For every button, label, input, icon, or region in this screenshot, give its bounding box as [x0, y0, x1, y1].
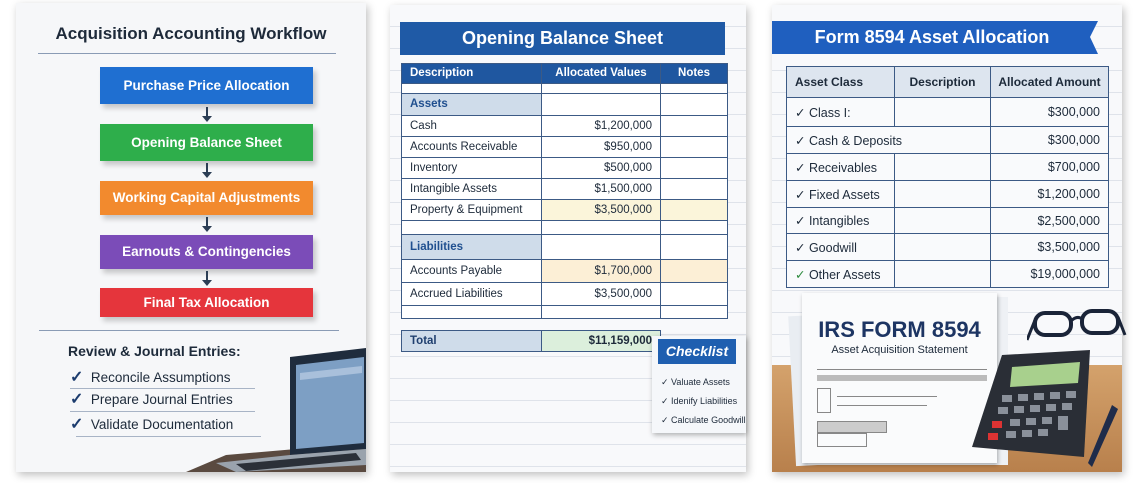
table: asset classes: ✓ Class I: [795, 106, 851, 120]
table: asset classes: $700,000 [1048, 160, 1100, 174]
step: opening balance sheet [100, 124, 313, 161]
icon: calculator [972, 350, 1118, 467]
table: balance sheet: Intangible Assets [410, 182, 497, 194]
callout: checklist [652, 336, 746, 433]
callout: checklist: ✓ Idenify Liabilities [661, 396, 737, 406]
total row [401, 330, 661, 352]
table: balance sheet: Inventory [410, 162, 457, 174]
table: balance sheet: Assets [410, 98, 448, 110]
title bar: opening balance sheet [400, 22, 725, 55]
table: asset classes: Description [909, 75, 976, 89]
table: asset classes: ✓ Cash & Deposits [795, 134, 902, 148]
table: balance sheet: Accrued Liabilities [410, 288, 503, 300]
table: balance sheet: $500,000 [604, 162, 652, 174]
step: final tax allocation: Final Tax Allocation [143, 295, 270, 310]
table: balance sheet: $1,200,000 [594, 120, 652, 132]
table: balance sheet: $1,500,000 [594, 182, 652, 194]
arrow 4 [202, 271, 212, 286]
heading: review & journal entries: Review & Journal Entries: [68, 343, 241, 359]
step: working capital adjustments [100, 181, 313, 215]
table: asset classes: $3,500,000 [1037, 240, 1100, 254]
table: balance sheet: Liabilities [410, 240, 463, 252]
illustration: IRS form 8594 document: Asset Acquisition Statement [831, 344, 968, 356]
table: asset classes: ✓ Other Assets [795, 268, 881, 282]
table: balance sheet [401, 63, 728, 319]
title bar: opening balance sheet: Opening Balance Sheet [462, 28, 663, 48]
table: asset classes: ✓ Receivables [795, 160, 877, 174]
table: balance sheet: Accounts Payable [410, 264, 502, 276]
checklist items: ✓ Reconcile Assumptions [70, 369, 230, 386]
table: asset classes: $2,500,000 [1037, 214, 1100, 228]
table: asset classes: $19,000,000 [1030, 267, 1100, 281]
table: asset classes: Allocated Amount [998, 75, 1101, 89]
icon: laptop [186, 348, 366, 472]
step: working capital adjustments: Working Capital Adjustments [113, 190, 300, 205]
icon: glasses [1027, 309, 1126, 340]
table: balance sheet: Notes [678, 67, 710, 79]
arrow 2 [202, 163, 212, 178]
callout: checklist: ✓ Valuate Assets [661, 377, 730, 387]
illustration: desk [772, 365, 1122, 472]
table: balance sheet: $3,500,000 [594, 288, 652, 300]
illustration: IRS form 8594 document [788, 292, 1008, 467]
checklist items: ✓ Validate Documentation [70, 416, 233, 433]
checklist items [70, 369, 261, 437]
arrow 1 [202, 107, 212, 122]
title ribbon [772, 21, 1098, 54]
table: balance sheet: Description [410, 67, 473, 79]
panel: form 8594 asset allocation [772, 5, 1122, 472]
table: asset classes [786, 66, 1109, 288]
illustration: IRS form 8594 document: IRS FORM 8594 [818, 317, 981, 342]
table: asset classes: $300,000 [1048, 105, 1100, 119]
title ribbon: Form 8594 Asset Allocation [815, 27, 1049, 47]
step: earnouts [100, 235, 313, 269]
table: asset classes: ✓ Goodwill [795, 240, 857, 254]
table: balance sheet: $3,500,000 [594, 204, 652, 216]
table: asset classes: ✓ Fixed Assets [795, 188, 880, 202]
callout: checklist: Checklist [666, 343, 728, 359]
total row: Total [410, 334, 437, 346]
step: final tax allocation [100, 288, 313, 317]
panel: opening balance sheet [390, 5, 746, 472]
table: asset classes: $1,200,000 [1037, 187, 1100, 201]
step: purchase price allocation: Purchase Price Allocation [123, 78, 290, 93]
table: asset classes: $300,000 [1048, 133, 1100, 147]
table: balance sheet: Accounts Receivable [410, 140, 517, 152]
arrow 3 [202, 217, 212, 232]
table: balance sheet: $950,000 [604, 140, 652, 152]
step: earnouts: Earnouts & Contingencies [122, 244, 291, 259]
panel: acquisition accounting workflow [16, 3, 366, 472]
callout: checklist: ✓ Calculate Goodwill [661, 415, 746, 425]
step: purchase price allocation [100, 67, 313, 104]
table: balance sheet: Allocated Values [555, 67, 647, 79]
table: balance sheet: $1,700,000 [594, 264, 652, 276]
total row: $11,159,000 [589, 334, 652, 346]
table: balance sheet: Cash [410, 120, 437, 132]
title: workflow: Acquisition Accounting Workflow [55, 24, 327, 43]
step: opening balance sheet: Opening Balance Sheet [131, 135, 282, 150]
table: asset classes: ✓ Intangibles [795, 214, 869, 228]
table: asset classes: Asset Class [795, 75, 863, 89]
checklist items: ✓ Prepare Journal Entries [70, 391, 233, 408]
table: balance sheet: Property & Equipment [410, 204, 523, 216]
